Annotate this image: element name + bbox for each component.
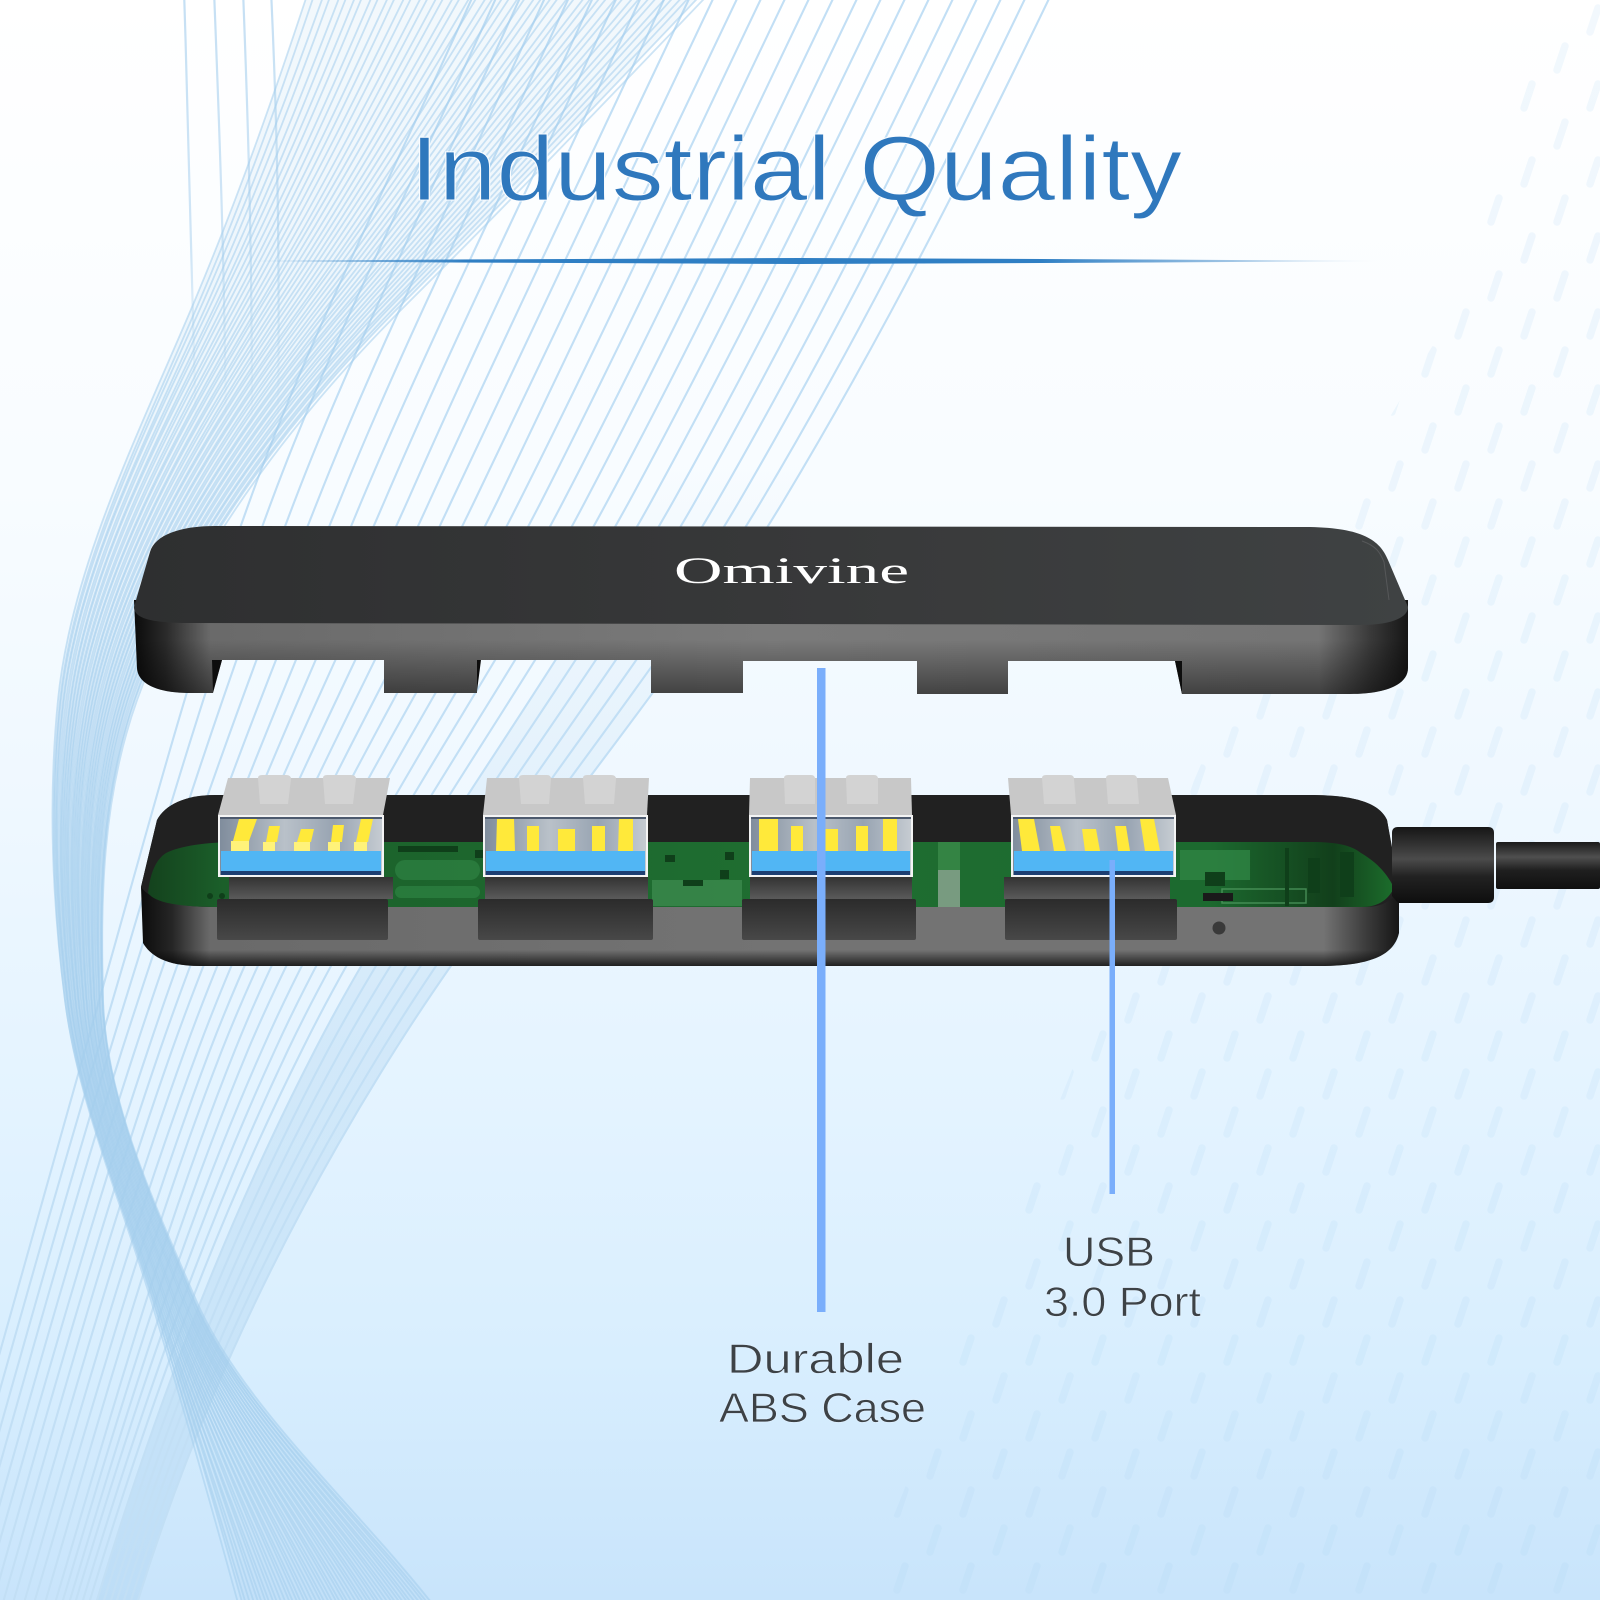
decorative wave lines [0,0,1058,1600]
background dash pattern [1026,4,1600,1250]
USB port 3 [742,775,916,940]
brand name: Omivine [674,551,909,592]
label: Durable ABS Case: Durable [727,1335,904,1382]
USB port 4 [1004,775,1177,940]
label: USB 3.0 Port [1044,1228,1201,1325]
title: Industrial Quality [410,119,1183,220]
title divider line [235,258,1385,264]
USB port 2 [478,775,653,940]
label: USB 3.0 Port: 3.0 Port [1044,1278,1201,1325]
circuit board [148,842,1394,907]
label: Durable ABS Case: ABS Case [719,1384,926,1431]
USB port 1 [217,775,393,940]
USB cable [1392,827,1600,903]
leader line: port [1110,860,1115,1194]
leader line: case [817,668,826,1312]
base outer shell [141,795,1399,966]
USB hub lid [134,526,1408,694]
label: USB 3.0 Port: USB [1063,1228,1155,1275]
lid side wall with tabs [134,600,1408,694]
label: Durable ABS Case [719,1335,926,1431]
screw hole [1212,922,1226,934]
USB hub base [141,795,1399,966]
lid top face [134,526,1408,625]
base interior back wall [141,795,1399,907]
